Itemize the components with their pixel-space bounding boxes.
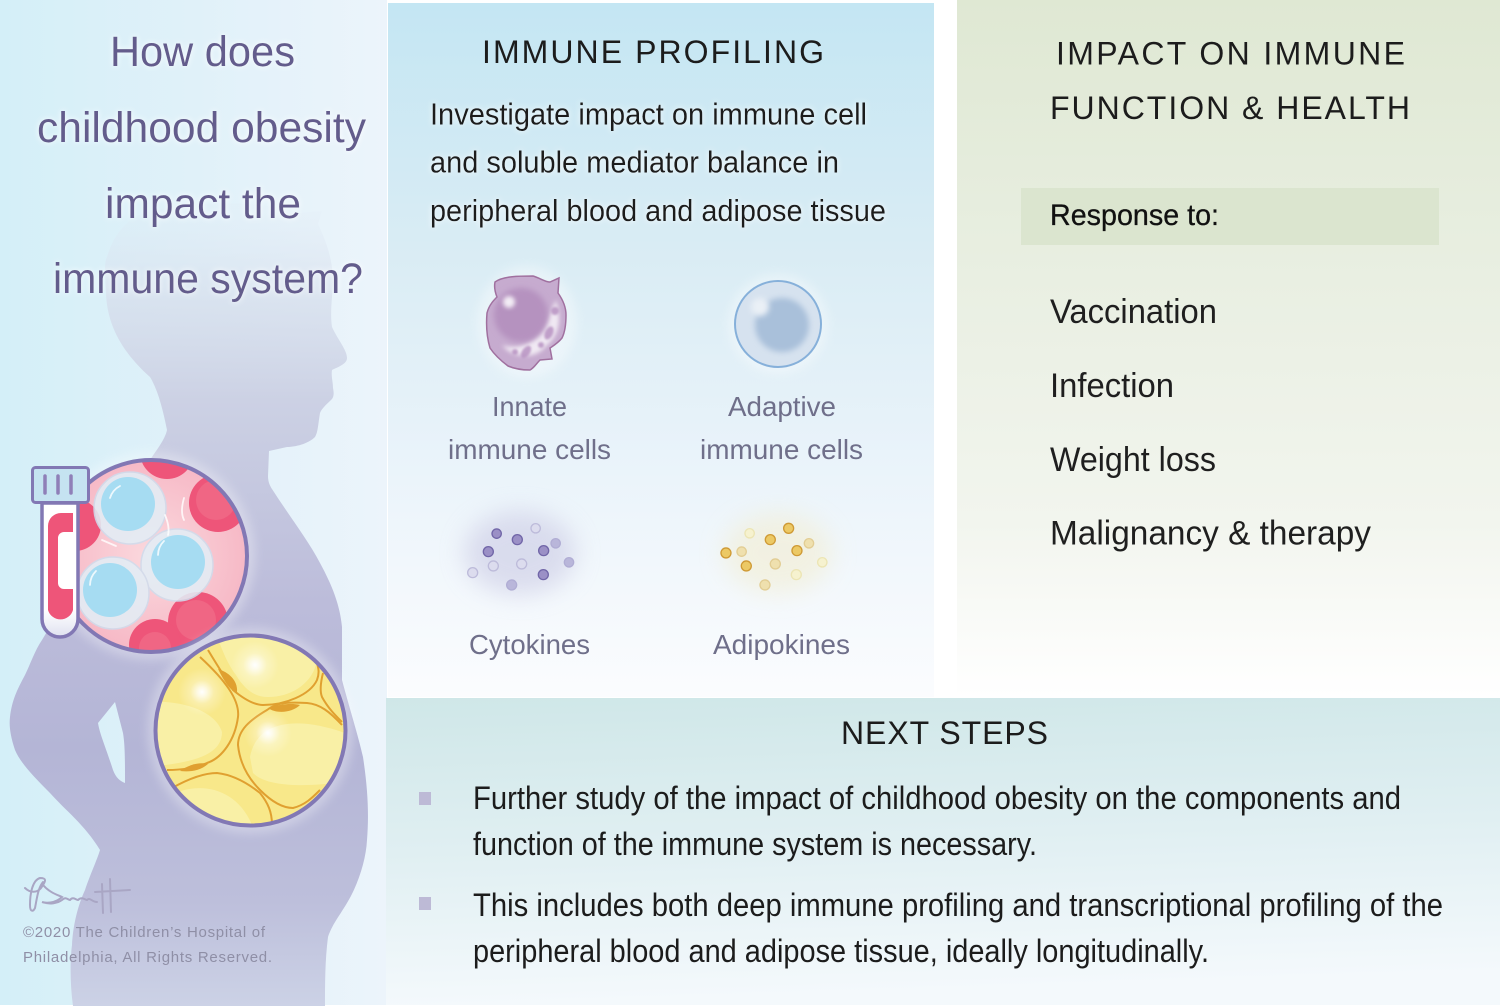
heading: immune profiling: IMMUNE PROFILING — [482, 34, 824, 70]
label: innate immune cells: Innate — [492, 391, 567, 422]
text block: immune profiling description: Investigate impact on immune cell — [430, 96, 867, 132]
title: childhood obesity — [37, 104, 366, 152]
list: response items: Vaccination — [1050, 293, 1217, 331]
bullet: first next step: function of the immune system is necessary. — [473, 826, 1037, 862]
label: adaptive immune cells: immune cells — [700, 434, 863, 465]
icon: blood magnified circle — [77, 452, 256, 662]
copyright text — [23, 924, 272, 966]
bullet: first next step — [419, 780, 1401, 862]
bullet: second next step — [419, 887, 1443, 969]
callout: response to — [1021, 188, 1439, 245]
title: immune system? — [53, 255, 363, 303]
copyright text: ©2020 The Children’s Hospital of — [23, 924, 266, 941]
bullet: first next step: Further study of the impact of childhood obesity on the components and — [473, 780, 1401, 816]
label: innate immune cells — [448, 391, 611, 465]
heading: next steps: NEXT STEPS — [841, 715, 1048, 751]
text block: immune profiling description: and soluble mediator balance in — [430, 144, 839, 180]
panel: immune profiling background — [388, 3, 934, 697]
icon: adipokines — [721, 513, 832, 593]
title: impact the — [105, 180, 301, 228]
icon: adipose tissue magnified circle — [148, 625, 354, 834]
icon: adaptive immune cell — [728, 274, 828, 374]
signature — [25, 878, 130, 913]
illustration: child silhouette — [10, 203, 368, 1006]
callout: response to: Response to: — [1050, 199, 1219, 232]
list: response items — [1050, 293, 1371, 552]
heading: impact on immune function and health: FUNCTION & HEALTH — [1050, 90, 1410, 126]
label: adaptive immune cells: Adaptive — [728, 391, 836, 422]
copyright text: Philadelphia, All Rights Reserved. — [23, 949, 272, 966]
icon: cytokines — [464, 511, 576, 595]
panel: question background — [0, 0, 387, 1005]
text block: immune profiling description — [430, 96, 886, 228]
heading: impact on immune function and health: IMPACT ON IMMUNE — [1056, 36, 1405, 72]
label: adipokines: Adipokines — [713, 629, 850, 660]
title — [37, 28, 366, 303]
list: response items: Infection — [1050, 367, 1174, 405]
list: response items: Malignancy & therapy — [1050, 514, 1371, 552]
heading: impact on immune function and health — [1050, 36, 1410, 126]
label: adaptive immune cells — [700, 391, 863, 465]
icon: innate immune cell — [477, 266, 577, 378]
bullet: second next step: peripheral blood and adipose tissue, ideally longitudinally. — [473, 933, 1209, 969]
panel: impact on immune function background — [957, 0, 1500, 697]
icon: test tube — [32, 468, 88, 637]
panel: next steps background — [386, 698, 1500, 1005]
list: response items: Weight loss — [1050, 441, 1216, 479]
text block: immune profiling description: peripheral blood and adipose tissue — [430, 193, 886, 228]
label: cytokines: Cytokines — [469, 629, 590, 660]
title: How does — [110, 28, 295, 76]
label: innate immune cells: immune cells — [448, 434, 611, 465]
